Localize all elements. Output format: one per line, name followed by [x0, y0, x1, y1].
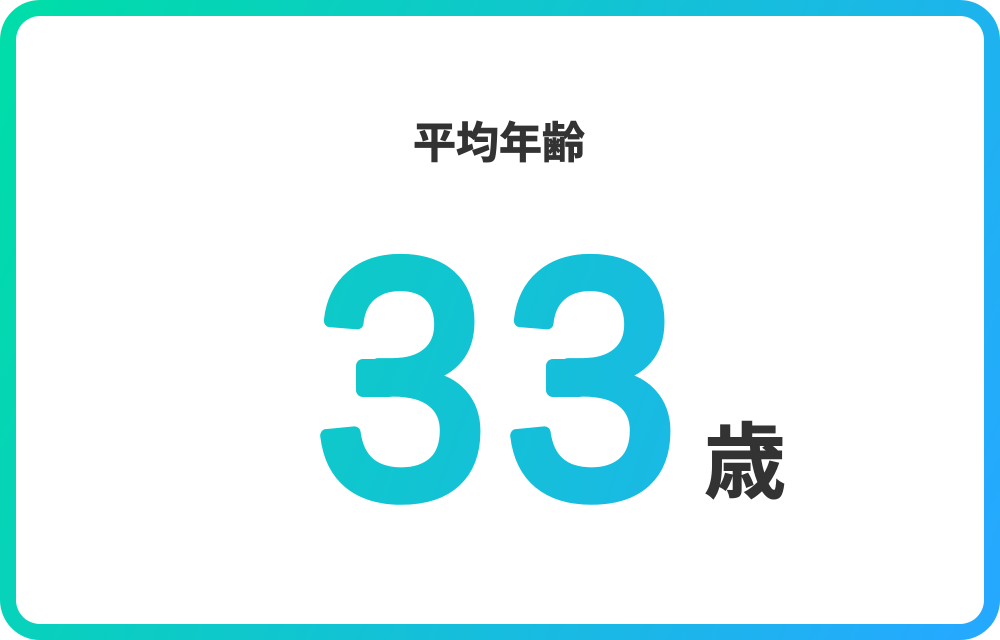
- heading: average age: 平均年齢: [413, 120, 585, 168]
- big number: 33: 33: [314, 191, 678, 566]
- unit: years old: 歳: [704, 418, 786, 509]
